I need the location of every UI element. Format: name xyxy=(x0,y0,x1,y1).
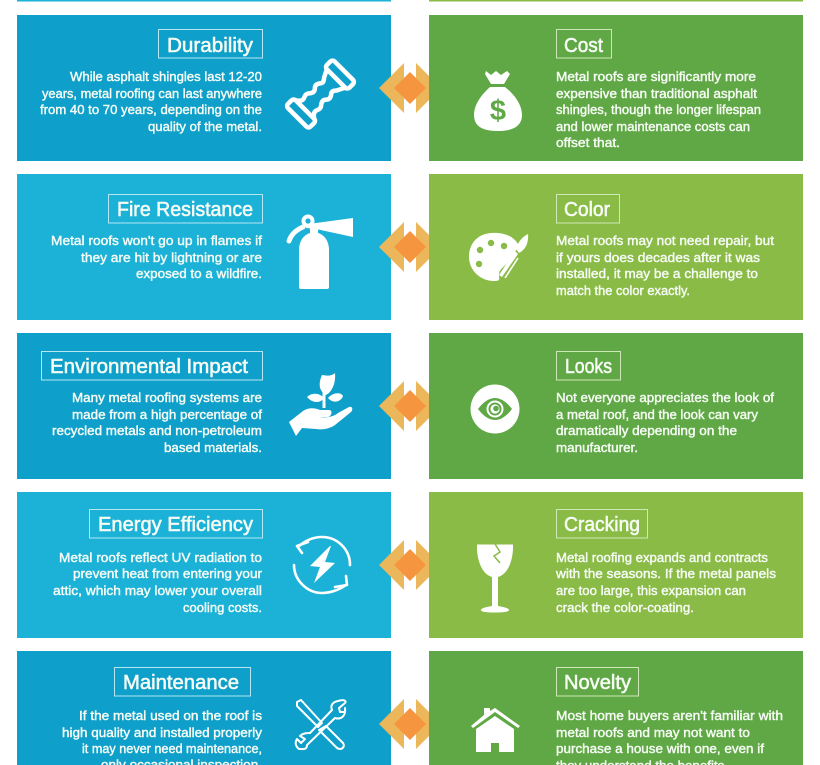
panel: energy efficiency xyxy=(17,492,391,638)
text: cost xyxy=(556,70,761,150)
heading: energy efficiency: Energy Efficiency xyxy=(98,514,253,536)
icon: flexible metal band xyxy=(286,59,355,129)
text: maintenance: it may never need maintenance, xyxy=(82,742,262,756)
text: color: if yours does decades after it was xyxy=(556,251,760,265)
text: novelty: metal roofs and may not want to xyxy=(556,726,750,740)
text: cost: offset that. xyxy=(556,136,620,150)
text: environmental impact: Many metal roofing systems are xyxy=(72,391,262,405)
text: color xyxy=(556,234,775,298)
panel: novelty xyxy=(429,651,803,765)
icon: hand holding plant xyxy=(289,373,352,436)
text: environmental impact: made from a high percentage of xyxy=(72,408,263,422)
heading: environmental impact xyxy=(42,352,262,380)
heading: fire resistance xyxy=(108,194,262,223)
icon: cracked glass xyxy=(477,544,513,612)
connector: fire resistance vs color xyxy=(379,222,441,272)
heading: cracking xyxy=(556,510,648,538)
text: looks: dramatically depending on the xyxy=(556,424,737,438)
connector: energy efficiency vs cracking xyxy=(379,540,441,590)
text: environmental impact: recycled metals and non-petroleum xyxy=(52,424,262,438)
text: energy efficiency: Metal roofs reflect UV radiation to xyxy=(59,551,262,565)
text: energy efficiency: attic, which may lower your overall xyxy=(53,584,262,598)
text: cost: Metal roofs are significantly more xyxy=(556,70,756,84)
icon: house xyxy=(471,708,520,752)
panel: color xyxy=(429,174,803,320)
panel: fire resistance xyxy=(17,174,391,320)
text: cracking: are too large, this expansion can xyxy=(556,584,746,598)
text: durability: quality of the metal. xyxy=(148,120,262,134)
text: maintenance: high quality and installed properly xyxy=(62,726,263,740)
text: durability: from 40 to 70 years, depending on the xyxy=(40,103,262,117)
text: durability: While asphalt shingles last 12-20 xyxy=(70,70,262,84)
text: cracking: with the seasons. If the metal panels xyxy=(555,567,776,581)
text: fire resistance: they are hit by lightning or are xyxy=(81,251,262,265)
icon: eye xyxy=(470,384,520,434)
text: cracking: crack the color-coating. xyxy=(556,601,694,615)
icon: fire extinguisher xyxy=(289,214,353,289)
previous row edge xyxy=(17,0,803,2)
icon: money bag: $ xyxy=(490,95,506,127)
text: durability xyxy=(40,70,262,134)
text: looks: a metal roof, and the look can vary xyxy=(556,408,759,422)
connector: environmental impact vs looks xyxy=(379,381,441,431)
text: looks: Not everyone appreciates the look of xyxy=(556,391,775,405)
text: maintenance xyxy=(62,709,263,765)
connector: maintenance vs novelty xyxy=(379,699,441,749)
connector: durability vs cost xyxy=(379,63,441,113)
text: fire resistance: exposed to a wildfire. xyxy=(136,267,262,281)
heading: looks: Looks xyxy=(565,356,612,378)
text: durability: years, metal roofing can last anywhere xyxy=(42,87,262,101)
heading: novelty xyxy=(556,668,638,696)
text: looks: manufacturer. xyxy=(556,441,638,455)
icon: paint palette xyxy=(469,233,528,281)
heading: durability: Durability xyxy=(167,35,253,57)
panel: cracking xyxy=(429,492,803,638)
heading: color xyxy=(556,194,620,223)
heading: durability xyxy=(158,30,262,58)
text: looks xyxy=(556,391,775,455)
text: energy efficiency: cooling costs. xyxy=(183,601,262,615)
heading: novelty: Novelty xyxy=(564,672,631,694)
panel: looks xyxy=(429,333,803,479)
icon: money bag xyxy=(474,71,522,131)
panel: durability xyxy=(17,15,391,161)
text: energy efficiency xyxy=(53,551,262,615)
panel: maintenance xyxy=(17,651,391,765)
text: novelty xyxy=(556,709,783,765)
heading: cracking: Cracking xyxy=(564,514,640,536)
text: novelty: Most home buyers aren't familiar with xyxy=(556,709,783,723)
text: energy efficiency: prevent heat from entering your xyxy=(73,567,262,581)
text: maintenance: If the metal used on the roof is xyxy=(79,709,262,723)
text: novelty: purchase a house with one, even if xyxy=(556,742,765,756)
heading: fire resistance: Fire Resistance xyxy=(117,199,253,221)
heading: cost: Cost xyxy=(564,35,603,57)
heading: energy efficiency xyxy=(90,510,262,538)
text: cracking: Metal roofing expands and contracts xyxy=(556,551,768,565)
panel: environmental impact xyxy=(17,333,391,479)
text: fire resistance xyxy=(51,234,263,281)
text: cost: and lower maintenance costs can xyxy=(556,120,750,134)
heading: environmental impact: Environmental Impact xyxy=(50,356,248,378)
icon: crossed tools xyxy=(296,700,346,749)
heading: color: Color xyxy=(564,199,610,221)
text: color: match the color exactly. xyxy=(556,284,690,298)
heading: maintenance xyxy=(114,668,250,696)
text: cost: expensive than traditional asphalt xyxy=(556,87,758,101)
panel: cost xyxy=(429,15,803,161)
icon: energy cycle bolt xyxy=(294,537,350,593)
text: environmental impact: based materials. xyxy=(164,441,262,455)
text: color: Metal roofs may not need repair, but xyxy=(556,234,775,248)
text: cost: shingles, though the longer lifespan xyxy=(556,103,761,117)
heading: maintenance: Maintenance xyxy=(123,672,239,694)
heading: cost xyxy=(556,30,612,58)
text: color: installed, it may be a challenge to xyxy=(556,267,758,281)
text: cracking xyxy=(555,551,776,615)
text: fire resistance: Metal roofs won't go up in flames if xyxy=(51,234,263,248)
heading: looks xyxy=(556,352,620,380)
text: environmental impact xyxy=(52,391,263,455)
